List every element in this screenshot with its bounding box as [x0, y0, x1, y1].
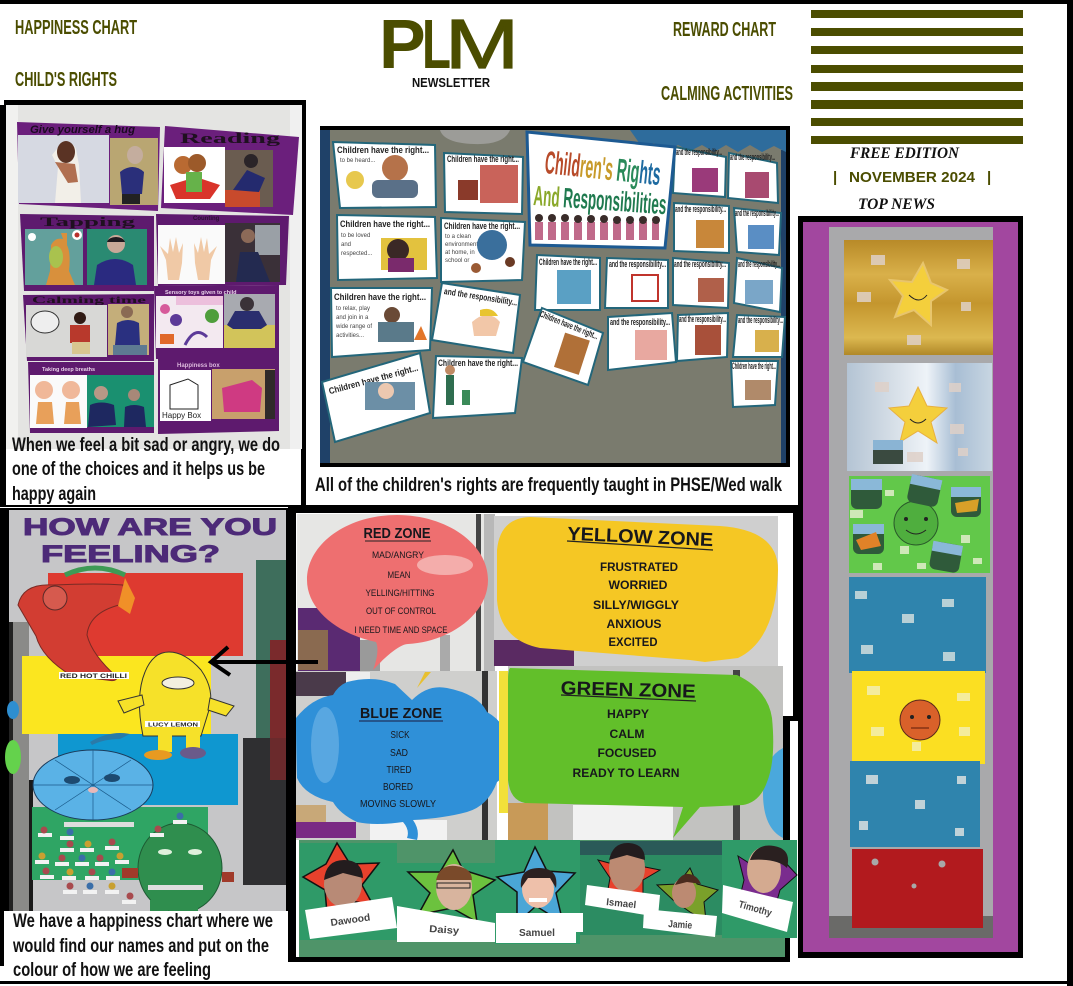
panel: red zone: RED ZONE	[364, 525, 430, 542]
card group: rights posters: Children have the right...	[538, 309, 600, 341]
star: Jamie	[643, 868, 718, 937]
star: Jamie: Jamie	[668, 919, 693, 932]
card group: rights posters: Children have the right...	[337, 145, 429, 155]
card group: rights posters: and	[341, 242, 351, 248]
card: happiness box: Happy Box	[162, 411, 201, 420]
card group: rights posters	[322, 142, 785, 442]
character: red hot chilli	[18, 568, 135, 681]
paper-chain children	[535, 214, 660, 240]
panel: blue zone: SAD	[390, 747, 408, 759]
subtitle: NEWSLETTER	[412, 75, 491, 90]
reward level: gold	[844, 240, 993, 355]
card group: rights posters: and the responsibility...	[610, 317, 670, 327]
card group: rights posters: to a clean	[445, 234, 471, 240]
card: tapping	[20, 214, 154, 291]
yellow band	[22, 656, 211, 734]
panel: red zone: I NEED TIME AND SPACE	[354, 625, 448, 636]
character: lucy lemon: LUCY LEMON	[148, 722, 198, 728]
caption: rights: All of the children's rights are frequently taught in PHSE/Wed walk	[315, 475, 782, 496]
green band	[32, 807, 208, 880]
card group: rights posters: respected...	[341, 251, 373, 257]
card: give yourself a hug	[17, 122, 160, 211]
card: reading	[161, 126, 299, 215]
panel: blue zone: SICK	[390, 729, 410, 741]
card group: rights posters: to be loved	[341, 233, 370, 239]
striped masthead block	[811, 10, 1023, 144]
star: Timothy	[722, 846, 797, 932]
blue band	[58, 734, 238, 805]
title	[379, 5, 519, 83]
card group: rights posters: Children have the right...	[539, 257, 597, 267]
card: happiness box	[158, 357, 279, 434]
top news label: TOP NEWS	[858, 196, 935, 213]
caption: happiness chart: would find our names and put on the	[12, 936, 269, 957]
title: M	[445, 5, 519, 83]
card: calming time	[23, 294, 154, 361]
card group: rights posters: to be heard...	[340, 158, 376, 164]
card: tapping: Tapping	[40, 214, 136, 229]
card: happiness box: Happiness box	[177, 363, 220, 369]
arrow	[211, 647, 318, 675]
heading: how are you feeling: FEELING?	[41, 541, 220, 568]
panel: yellow zone: ANXIOUS	[606, 617, 662, 631]
card group: rights posters: and the responsibility...	[443, 286, 518, 308]
panel: green zone: GREEN ZONE	[560, 678, 696, 703]
panel: blue zone: BORED	[383, 781, 413, 793]
panel: blue zone	[296, 671, 507, 840]
panel: green zone: CALM	[610, 727, 644, 741]
panel: yellow zone	[494, 516, 778, 666]
card group: rights posters: school or	[445, 258, 469, 264]
panel: children's rights board: and the responsibility...	[738, 315, 783, 325]
black frame: zones	[288, 505, 800, 962]
cartoon blobs on posters	[346, 155, 779, 410]
card group: rights posters: at home, in	[445, 250, 475, 256]
reward level: yellow	[852, 671, 985, 764]
character: blue ball	[33, 733, 153, 827]
panel: yellow zone: WORRIED	[608, 578, 668, 592]
panel: name stars	[299, 840, 797, 957]
caption: calming choices: When we feel a bit sad or angry, we do	[12, 435, 280, 456]
panel: green zone: READY TO LEARN	[572, 766, 680, 780]
character: red hot chilli: RED HOT CHILLI	[60, 674, 127, 680]
card group: rights posters: and the responsibility...	[730, 152, 775, 162]
red band	[48, 573, 243, 656]
card group: rights posters: and the responsibility...	[674, 259, 726, 269]
reward level: green	[849, 474, 990, 574]
panel: red zone: MAD/ANGRY	[372, 550, 425, 561]
star: Daisy: Daisy	[429, 924, 460, 937]
card group: rights posters: Children have the right...	[447, 154, 519, 164]
masthead	[15, 5, 1023, 213]
card: calming time: Calming time	[32, 295, 146, 305]
card group: rights posters: Children have the right...	[438, 358, 518, 368]
caption: happiness chart	[4, 911, 288, 981]
panel: red zone: YELLING/HITTING	[366, 588, 434, 599]
card: sensory toys	[154, 285, 279, 359]
heading: how are you feeling	[23, 514, 277, 568]
card group: rights posters: activities...	[336, 333, 364, 339]
card group: rights posters: Children have the right...	[444, 221, 520, 231]
panel: green zone: HAPPY	[607, 707, 649, 721]
star: Samuel	[496, 847, 583, 943]
title poster	[527, 132, 675, 248]
caption: calming choices: one of the choices and it helps us be	[12, 459, 265, 480]
card group: rights posters: and join in a	[336, 315, 369, 321]
card group: rights posters: Children have the right...	[732, 361, 776, 371]
star: Daisy	[397, 850, 495, 942]
star: Ismael: Ismael	[606, 897, 637, 911]
panel: happiness chart	[0, 508, 293, 981]
star: Timothy: Timothy	[737, 899, 773, 919]
caption: calming choices	[12, 435, 280, 505]
panel: green zone: FOCUSED	[598, 746, 657, 760]
caption: calming choices: happy again	[12, 484, 96, 505]
name tag stars on chart	[35, 812, 187, 904]
panel: blue zone: TIRED	[386, 764, 412, 776]
panel: blue zone: MOVING SLOWLY	[360, 798, 436, 810]
panel: children's rights board: and the responsibility...	[738, 259, 780, 269]
panel: children's rights board	[315, 126, 790, 496]
caption: happiness chart: colour of how we are feeling	[13, 960, 211, 981]
card group: rights posters: Children have the right...	[340, 219, 430, 229]
panel: red zone	[297, 514, 495, 671]
card group: rights posters: and the responsibility...	[675, 204, 726, 214]
card: taking deep breaths: Taking deep breaths	[42, 367, 95, 373]
reward level: blue lower	[850, 761, 980, 847]
card group: rights posters: Children have the right...	[328, 363, 419, 396]
star: Dawood	[303, 843, 397, 939]
panel: red zone: MEAN	[388, 570, 411, 581]
panel: blue zone: BLUE ZONE	[360, 705, 442, 722]
nav link: calming activities: CALMING ACTIVITIES	[661, 83, 793, 105]
title poster: Children's Rights	[543, 144, 662, 192]
panel: green zone	[499, 666, 783, 840]
card: reading: Reading	[180, 131, 281, 147]
card: taking deep breaths	[28, 362, 154, 433]
card: counting: Counting	[193, 216, 220, 222]
issue date: |	[987, 169, 991, 186]
card group: rights posters: and the responsibility...	[676, 147, 722, 157]
issue date: |	[833, 169, 837, 186]
reward level: red	[852, 849, 983, 928]
character: green monster	[122, 823, 234, 913]
panel: yellow zone: FRUSTRATED	[600, 560, 678, 574]
panel: red zone: OUT OF CONTROL	[366, 606, 436, 617]
card group: rights posters: and the responsibility...	[609, 259, 666, 269]
star: Dawood: Dawood	[330, 913, 371, 929]
reward level: silver	[847, 363, 992, 471]
card group: rights posters: to relax, play	[336, 306, 370, 312]
panel: yellow zone: YELLOW ZONE	[567, 524, 714, 551]
heading: how are you feeling: HOW ARE YOU	[23, 514, 277, 541]
card: sensory toys: Sensory toys given to child	[165, 290, 237, 296]
panel: yellow zone: EXCITED	[608, 635, 658, 649]
card: give yourself a hug: Give yourself a hug	[30, 124, 135, 136]
star: Samuel: Samuel	[519, 928, 555, 939]
star: Ismael	[585, 843, 660, 917]
card group: rights posters: and the responsibility...	[735, 208, 779, 218]
nav link: happiness chart: HAPPINESS CHART	[15, 17, 137, 39]
panel: reward chart	[798, 216, 1023, 958]
title: L	[422, 5, 451, 83]
card group: rights posters: and the responsibility...	[679, 314, 726, 324]
card group: rights posters: environment,	[445, 242, 480, 248]
edition label: FREE EDITION	[849, 145, 960, 162]
issue date: NOVEMBER 2024	[849, 169, 976, 186]
caption: happiness chart: We have a happiness chart where we	[13, 911, 273, 932]
nav link: child's rights: CHILD'S RIGHTS	[15, 69, 117, 91]
card: counting	[156, 214, 289, 286]
character: lucy lemon	[118, 652, 234, 760]
panel: yellow zone: SILLY/WIGGLY	[593, 598, 679, 612]
title poster: And Responsibilities	[533, 180, 667, 220]
title: P	[379, 5, 426, 83]
card group: rights posters: wide range of	[335, 324, 372, 330]
reward level: blue	[849, 577, 986, 673]
card group: rights posters: Children have the right...	[334, 292, 426, 302]
panel: calming choices	[0, 100, 306, 507]
nav link: reward chart: REWARD CHART	[673, 19, 776, 41]
